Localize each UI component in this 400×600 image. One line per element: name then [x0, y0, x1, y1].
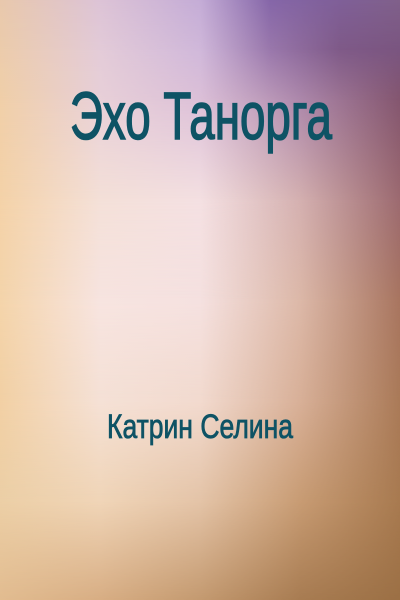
author name: Катрин Селина	[107, 408, 294, 446]
